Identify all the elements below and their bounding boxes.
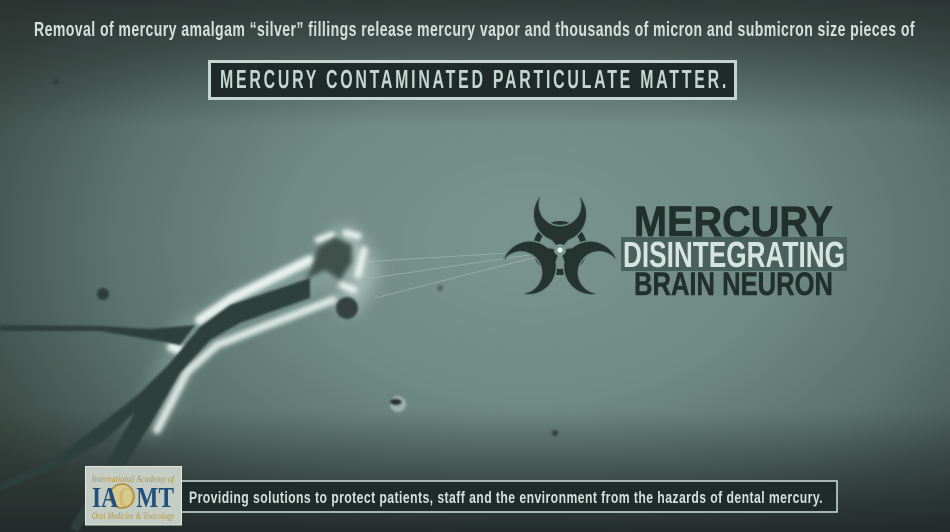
dark specks — [54, 80, 558, 436]
headline: mercury disintegrating brain neuron — [621, 198, 847, 302]
logo letters: IAOMT — [92, 482, 174, 514]
logo top line: International Academy of — [91, 474, 175, 484]
soft halo — [150, 270, 330, 420]
MERCURY: MERCURY — [634, 198, 833, 246]
bright edges — [157, 233, 364, 430]
globe — [110, 484, 134, 508]
logo bottom line: Oral Medicine & Toxicology — [92, 511, 174, 521]
logo: IAOMT — [86, 466, 182, 525]
icon: biohazard symbol — [501, 197, 619, 299]
neuron growth head — [305, 237, 352, 280]
neuron trunk — [0, 278, 310, 532]
debris particle — [390, 396, 406, 412]
BRAIN NEURON: BRAIN NEURON — [634, 266, 833, 302]
footer tagline — [175, 481, 837, 512]
filaments — [362, 250, 556, 298]
DISINTEGRATING label: DISINTEGRATING — [623, 234, 845, 275]
dark ball — [336, 297, 358, 319]
banner: particulate matter — [210, 62, 736, 98]
neuron micrograph — [0, 80, 558, 532]
